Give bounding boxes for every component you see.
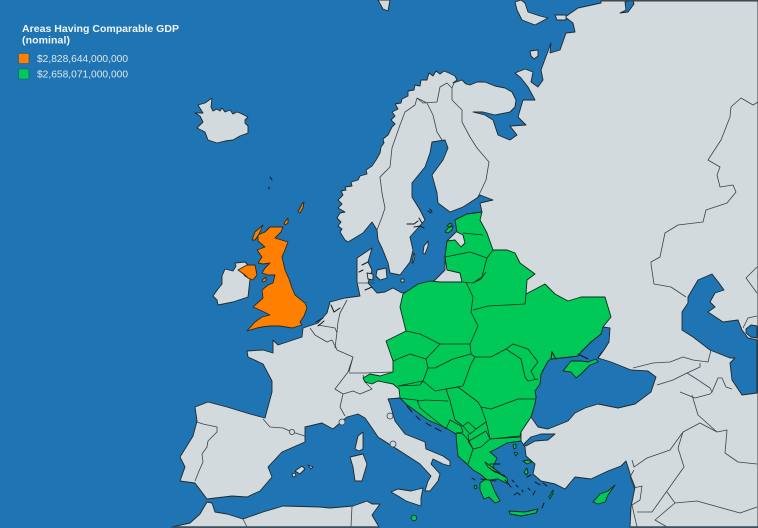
Anglesey [262, 277, 266, 282]
highlighted region: United Kingdom (orange) [238, 202, 307, 331]
microstate: San Marino [387, 413, 393, 419]
legend title: Areas Having Comparable GDP [22, 23, 179, 35]
borders: Hungary and Austria [393, 354, 475, 391]
green countries combined outline [363, 212, 611, 503]
microstate: Andorra [289, 429, 295, 435]
borders: Romania south and Bulgaria [446, 387, 535, 439]
legend swatch: orange [18, 54, 29, 64]
highlighted region: Eastern Europe (green) [363, 212, 615, 521]
borders: Poland, Belarus and Ukraine [466, 272, 526, 342]
Aland islands [428, 209, 432, 213]
Faroe Islands [269, 177, 272, 189]
Saaremaa and Hiiumaa [445, 226, 453, 233]
sea: Black Sea and Azov [531, 327, 656, 429]
Crimea [563, 359, 598, 378]
land: Ireland [213, 262, 250, 305]
legend title second line: (nominal) [22, 34, 70, 46]
Outer Hebrides [252, 225, 263, 240]
borders: Baltics and Belarus [445, 233, 493, 283]
microstate: Monaco [339, 419, 345, 425]
Northern Ireland [238, 265, 257, 280]
borders: Caucasus and Georgia [633, 350, 757, 464]
country borders inside green region [393, 233, 538, 464]
land: Gotland, Oland and Bornholm [401, 241, 428, 282]
borders: Romania and Moldova [475, 344, 538, 381]
land: Danish islands [367, 268, 387, 280]
land: Sardinia [350, 454, 367, 481]
map: national borders [195, 83, 758, 527]
borders: Poland south, Czechia and Slovakia [406, 331, 471, 368]
Crete [509, 509, 538, 516]
Great Britain [247, 227, 307, 331]
land: Sicily [391, 488, 423, 506]
Cyprus [593, 485, 615, 504]
inland seas [524, 0, 757, 446]
land: North Africa [172, 501, 380, 527]
Aegean small islands [512, 475, 547, 508]
sea: Marmara [524, 434, 555, 446]
land: Kolguev and Arctic islands [378, 0, 566, 59]
borders: Turkey and Middle East [630, 267, 757, 527]
sea: Caspian [682, 274, 757, 395]
borders: Africa [243, 506, 352, 527]
borders: Western Balkans [398, 381, 521, 464]
map: land masses [172, 0, 758, 527]
microstate: Vatican [390, 441, 396, 447]
legend [18, 23, 179, 80]
sea: Arctic bay [620, 0, 634, 13]
microstates [289, 413, 396, 447]
Dnieper estuary and Kerch [551, 352, 602, 359]
Greek coast dark marks [472, 464, 511, 487]
Dutch delta [316, 305, 340, 326]
land: Iceland [195, 98, 248, 143]
dark coastal detail marks [269, 177, 602, 508]
sea: Kara-Bogaz gulf [746, 325, 757, 338]
borders: Denmark-Germany [358, 282, 375, 284]
borders: Western Europe [195, 300, 393, 481]
Orkney [284, 218, 288, 225]
legend label: green value: $2,658,071,000,000 [37, 70, 128, 80]
frame edges [172, 1, 758, 527]
land: Caspian east shore arc [743, 316, 757, 328]
borders: Russia-Kazakhstan [651, 98, 758, 297]
Dalmatian coast [407, 406, 441, 431]
land: Balearic Islands [292, 465, 313, 477]
legend label: orange value: $2,828,644,000,000 [37, 54, 128, 65]
Shetland [298, 202, 304, 213]
Danish straits [359, 262, 372, 290]
land: Corsica [355, 432, 363, 451]
Malta [411, 515, 417, 521]
land: continental Eurasia and Europe [180, 1, 758, 527]
borders: Nordic [377, 83, 489, 230]
legend swatch: green [18, 69, 29, 79]
Aegean islands [474, 444, 553, 499]
Stockholm archipelago [407, 218, 424, 228]
Gulf of Corinth [481, 479, 496, 481]
